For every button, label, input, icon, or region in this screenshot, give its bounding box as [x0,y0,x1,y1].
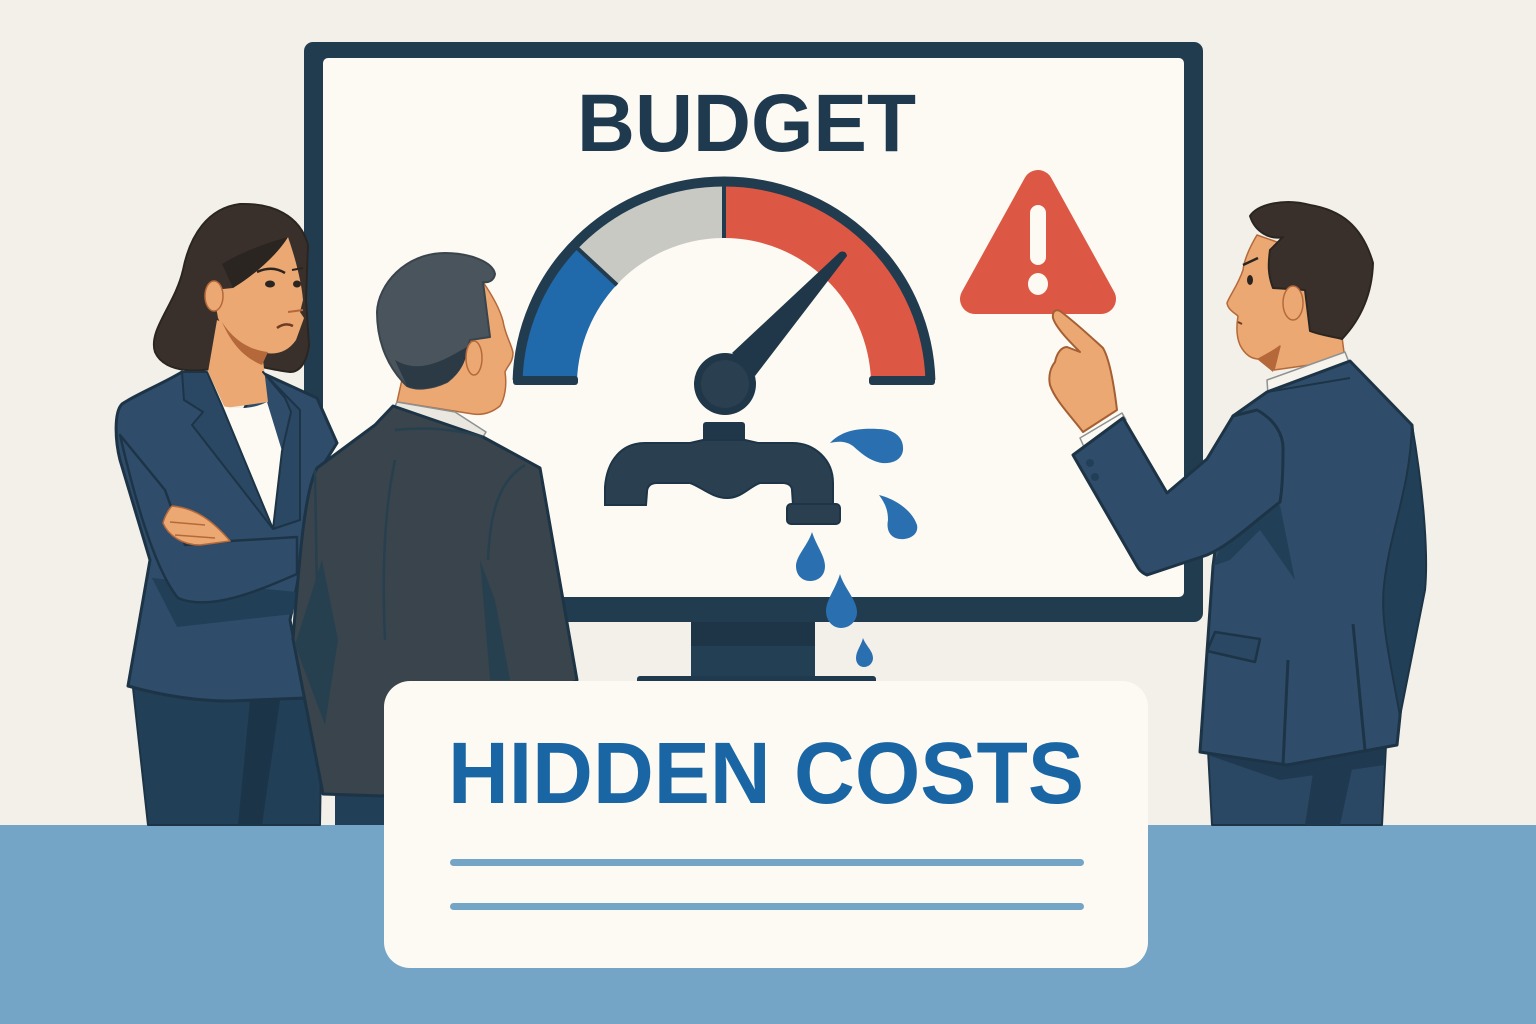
jacket details [1207,378,1365,765]
gauge needle [694,252,847,415]
person: woman [116,204,337,825]
table [0,825,1536,1024]
neck and face [397,282,513,414]
collar [393,402,486,437]
neck [208,320,268,408]
card rule lines [450,859,1084,910]
heading: hidden costs: HIDDEN COSTS [448,725,1084,822]
collar [1267,352,1350,395]
trousers [1208,745,1386,825]
card: hidden costs [384,681,1148,968]
faucet [605,422,840,524]
gauge [513,180,935,415]
charcoal jacket [293,406,577,796]
raised hand [1049,310,1117,432]
trouser leg [335,790,387,825]
ear [466,341,482,375]
hair [1250,202,1373,339]
heading: budget: BUDGET [577,78,916,169]
facial features [1238,258,1280,372]
cuff buttons [1086,459,1094,467]
hair [154,204,309,372]
warning triangle [975,185,1101,299]
crossed arms [120,435,297,627]
raised sleeve [1073,410,1283,575]
person: centre man [293,253,577,825]
blazer [116,372,337,701]
back shadow [1383,425,1426,716]
person: right man [1049,202,1426,825]
shirt cuff [1080,413,1126,447]
trousers [133,688,322,825]
lapels [182,372,300,529]
ear [205,281,223,311]
jacket body [1200,361,1418,765]
water drops [796,429,917,667]
white shirt [222,402,282,529]
hair fringe [222,237,288,288]
ear [1283,286,1303,320]
grey hair [377,253,495,389]
face and neck [1227,235,1345,370]
face [213,237,304,354]
facial features [222,268,303,365]
monitor [304,42,1203,684]
